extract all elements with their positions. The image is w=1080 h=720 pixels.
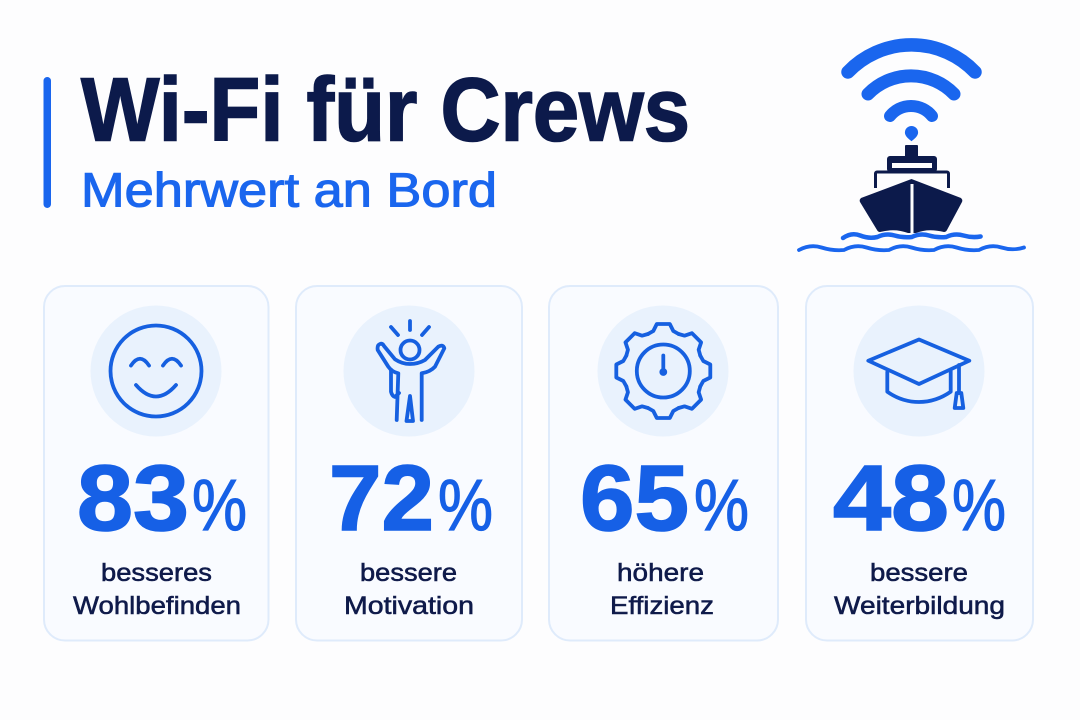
icon: wifi arcs xyxy=(848,45,975,116)
label line 1: besseres xyxy=(101,559,212,587)
icon: waves xyxy=(799,234,1024,250)
icon: wifi dot xyxy=(905,126,918,141)
label line 1: bessere xyxy=(870,559,968,587)
stat: 65: 65 xyxy=(580,446,689,550)
stat: 48: 48 xyxy=(833,446,949,550)
title: Wi-Fi für Crews xyxy=(81,60,690,160)
icon disc: gear xyxy=(598,306,728,436)
label line 2: Weiterbildung xyxy=(834,592,1005,620)
icon: ship xyxy=(860,145,962,234)
panel: Motivation xyxy=(296,286,522,640)
icon disc: graduation cap xyxy=(854,306,984,436)
panel: Weiterbildung xyxy=(806,286,1033,640)
icon: ship with wifi signal xyxy=(799,45,1024,250)
icon: smiling face xyxy=(110,326,202,416)
stat unit: % xyxy=(438,466,493,546)
label line 2: Wohlbefinden xyxy=(73,592,241,620)
panel: Wohlbefinden xyxy=(44,286,268,640)
panel: Effizienz xyxy=(549,286,778,640)
icon: cheering person xyxy=(378,321,444,421)
label line 2: Effizienz xyxy=(610,592,714,620)
icon disc: smile xyxy=(90,306,222,436)
subtitle: Mehrwert an Bord xyxy=(81,164,497,218)
label line 1: bessere xyxy=(360,559,457,587)
stat unit: % xyxy=(952,466,1006,546)
label line 1: höhere xyxy=(617,559,704,587)
stat: 83: 83 xyxy=(77,446,189,550)
icon: gear with gauge xyxy=(616,324,710,418)
stat unit: % xyxy=(694,466,749,546)
stat: 72: 72 xyxy=(329,446,434,550)
icon: graduation cap xyxy=(868,340,969,408)
icon disc: person xyxy=(344,306,474,436)
header accent bar xyxy=(44,77,51,208)
stat unit: % xyxy=(192,466,247,546)
label line 2: Motivation xyxy=(344,592,474,620)
